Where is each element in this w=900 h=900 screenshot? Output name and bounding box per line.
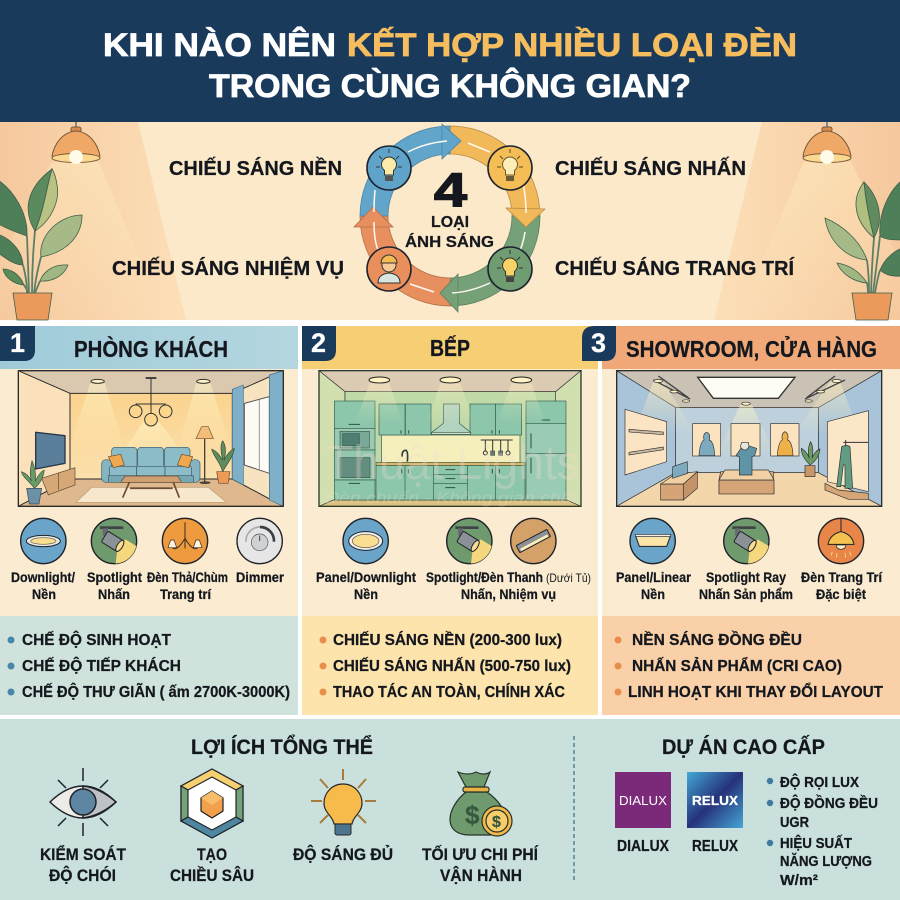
icon: yellow bulb <box>488 146 532 190</box>
diagram: circular arrows of 4 light types <box>354 124 545 312</box>
icon: hexagon cube <box>181 769 243 838</box>
caption line 2: CHIỀU SÂU <box>170 866 254 885</box>
caption: KIỂM SOÁT <box>40 845 127 864</box>
caption sub: Đặc biệt <box>816 586 866 602</box>
fixture: dimmer <box>236 518 284 585</box>
title highlighted phrase: KẾT HỢP NHIỀU LOẠI ĐÈN <box>347 27 797 63</box>
logo: Relux <box>687 772 743 855</box>
watermark text: Thuật Lights <box>325 437 580 490</box>
caption sub: Nhấn, Nhiệm vụ <box>461 586 556 602</box>
illustration: kitchen scene <box>319 371 581 506</box>
caption: TỐI ƯU CHI PHÍ <box>422 844 539 864</box>
list: showroom lighting <box>602 616 900 715</box>
caption sub: Nền <box>641 586 665 602</box>
caption: DIALUX <box>617 838 669 855</box>
ring centre number: 4 <box>434 163 467 216</box>
icon: spotlight <box>91 518 137 564</box>
ring centre caption line 2: ÁNH SÁNG <box>405 232 494 251</box>
benefit: cost optimisation <box>422 772 539 885</box>
caption: Spotlight Ray <box>706 569 786 585</box>
caption: Panel/Linear <box>616 569 691 585</box>
number badge 3: 3 <box>591 328 606 358</box>
icon: downlight <box>21 518 66 564</box>
number badge 2: 2 <box>311 328 326 358</box>
list: kitchen lighting: CHIẾU SÁNG NỀN (200-300 lux) <box>333 630 562 649</box>
arrowheads <box>354 124 545 312</box>
ring centre caption: LOẠI <box>431 214 469 231</box>
icon: task worker <box>367 247 411 291</box>
list: living room modes: CHẾ ĐỘ TIẾP KHÁCH <box>22 656 181 675</box>
icon: green bulb <box>488 247 532 291</box>
caption: TẠO <box>197 845 227 864</box>
header banner <box>0 0 900 122</box>
icon: right ceiling lamp <box>803 122 851 164</box>
icon: light bulb <box>311 769 376 835</box>
panel: kitchen <box>302 326 598 715</box>
watermark tagline: Đèn chuẩn - Không gian chất <box>325 489 578 507</box>
icon: linear bar light <box>511 518 556 564</box>
heading: BẾP <box>430 334 470 361</box>
arc: blue band <box>360 126 450 216</box>
dollar sign on bag: $ <box>465 800 480 830</box>
list: living room modes: CHẾ ĐỘ SINH HOẠT <box>22 630 171 649</box>
caption small: (Dưới Tủ) <box>546 571 591 585</box>
number badge 1 <box>0 326 35 361</box>
list: kitchen lighting: CHIẾU SÁNG NHẤN (500-750 lux) <box>333 656 571 675</box>
heading: premium projects: DỰ ÁN CAO CẤP <box>662 736 825 759</box>
panel: showroom <box>582 326 900 715</box>
number badge 3 <box>582 326 616 361</box>
fixture: track spotlight <box>699 518 793 602</box>
icon: left potted plant <box>0 169 82 320</box>
list: simulation metrics: ĐỘ RỌI LUX <box>780 773 859 791</box>
number badge 2 <box>302 326 336 361</box>
fixture: pendant chandelier <box>147 518 228 602</box>
icon: spotlight <box>447 518 492 564</box>
panel: overall benefits and premium projects <box>0 719 900 900</box>
arrow highlights <box>374 141 526 293</box>
list: simulation metrics: NĂNG LƯỢNG <box>780 853 872 870</box>
heading: SHOWROOM, CỬA HÀNG <box>626 334 877 362</box>
heading: PHÒNG KHÁCH <box>74 335 228 362</box>
icon: track spotlight <box>724 518 769 564</box>
list: simulation metrics <box>767 773 878 889</box>
icon: blue bulb <box>367 146 411 190</box>
title line 2: TRONG CÙNG KHÔNG GIAN? <box>209 68 691 104</box>
icon: chandelier <box>162 518 208 564</box>
panel: 4 types of light hero <box>0 122 900 320</box>
list: showroom lighting: NHẤN SẢN PHẨM (CRI CAO) <box>632 656 842 675</box>
arc: green band <box>450 216 540 306</box>
arc: orange band <box>360 216 450 306</box>
fixture: downlight <box>11 518 75 602</box>
dollar sign on coin: $ <box>492 814 501 831</box>
icon: pendant lamp <box>818 518 864 564</box>
fixture: decorative pendant <box>801 518 883 602</box>
logo: Relux: RELUX <box>692 793 738 808</box>
label: ambient lighting: CHIẾU SÁNG NỀN <box>169 157 342 180</box>
caption: Panel/Downlight <box>316 569 416 585</box>
list: simulation metrics: W/m² <box>780 872 818 889</box>
label: decorative lighting: CHIẾU SÁNG TRANG TRÍ <box>555 257 794 280</box>
icon: money bag <box>450 772 512 836</box>
caption: Đèn Trang Trí <box>801 569 883 585</box>
fixture: spotlight <box>87 518 142 602</box>
benefit: glare control <box>40 768 127 885</box>
icon: eye <box>50 768 116 836</box>
list: living room modes: CHẾ ĐỘ THƯ GIÃN ( ấm 2700K-3000K) <box>22 681 290 701</box>
caption line 2: ĐỘ CHÓI <box>49 866 116 885</box>
icon: panel downlight <box>343 518 388 564</box>
caption sub: Nền <box>32 586 56 602</box>
list: simulation metrics: HIỆU SUẤT <box>780 834 852 852</box>
title line 1: KHI NÀO NÊN <box>103 27 336 63</box>
fixture: panel downlight <box>316 518 416 602</box>
caption: Dimmer <box>236 569 284 585</box>
caption line 2: VẬN HÀNH <box>440 866 522 885</box>
label: task lighting: CHIẾU SÁNG NHIỆM VỤ <box>112 256 344 280</box>
icon: left ceiling lamp <box>52 122 100 164</box>
list: living room modes <box>0 616 298 715</box>
arc: yellow band <box>450 126 540 216</box>
list: showroom lighting: LINH HOẠT KHI THAY ĐỔI LAYOUT <box>628 682 883 701</box>
logo: Dialux: DIALUX <box>619 793 667 808</box>
label: accent lighting: CHIẾU SÁNG NHẤN <box>555 157 746 180</box>
fixture: spotlight and under-cabinet bar <box>426 518 591 602</box>
caption sub: Nhấn Sản phẩm <box>699 586 793 602</box>
heading: overall benefits: LỢI ÍCH TỔNG THỂ <box>191 735 373 759</box>
caption: Downlight/ <box>11 569 75 585</box>
caption: Spotlight/Đèn Thanh <box>426 569 543 585</box>
icon: right potted plant <box>825 178 900 320</box>
caption: Spotlight <box>87 569 142 585</box>
panel: living room <box>0 326 298 715</box>
number badge 1: 1 <box>10 328 25 358</box>
caption sub: Nền <box>354 586 378 602</box>
list: kitchen lighting <box>302 616 598 715</box>
list: simulation metrics: ĐỘ ĐỒNG ĐỀU <box>780 794 878 812</box>
caption: ĐỘ SÁNG ĐỦ <box>293 845 393 864</box>
icon: dimmer <box>237 518 282 564</box>
list: showroom lighting: NỀN SÁNG ĐỒNG ĐỀU <box>632 630 802 649</box>
caption: Đèn Thả/Chùm <box>147 569 228 585</box>
caption sub: Nhấn <box>98 586 130 602</box>
illustration: showroom scene <box>617 371 882 506</box>
fixture: panel linear <box>616 518 691 602</box>
list: simulation metrics: UGR <box>780 814 809 831</box>
caption: RELUX <box>692 838 738 855</box>
logo: Dialux <box>615 772 671 855</box>
illustration: living room scene <box>18 371 283 506</box>
benefit: sufficient brightness <box>293 769 393 864</box>
list: kitchen lighting: THAO TÁC AN TOÀN, CHÍNH XÁC <box>333 682 565 701</box>
icon: panel linear <box>630 518 675 564</box>
caption sub: Trang trí <box>160 586 212 602</box>
benefit: depth <box>170 769 254 885</box>
